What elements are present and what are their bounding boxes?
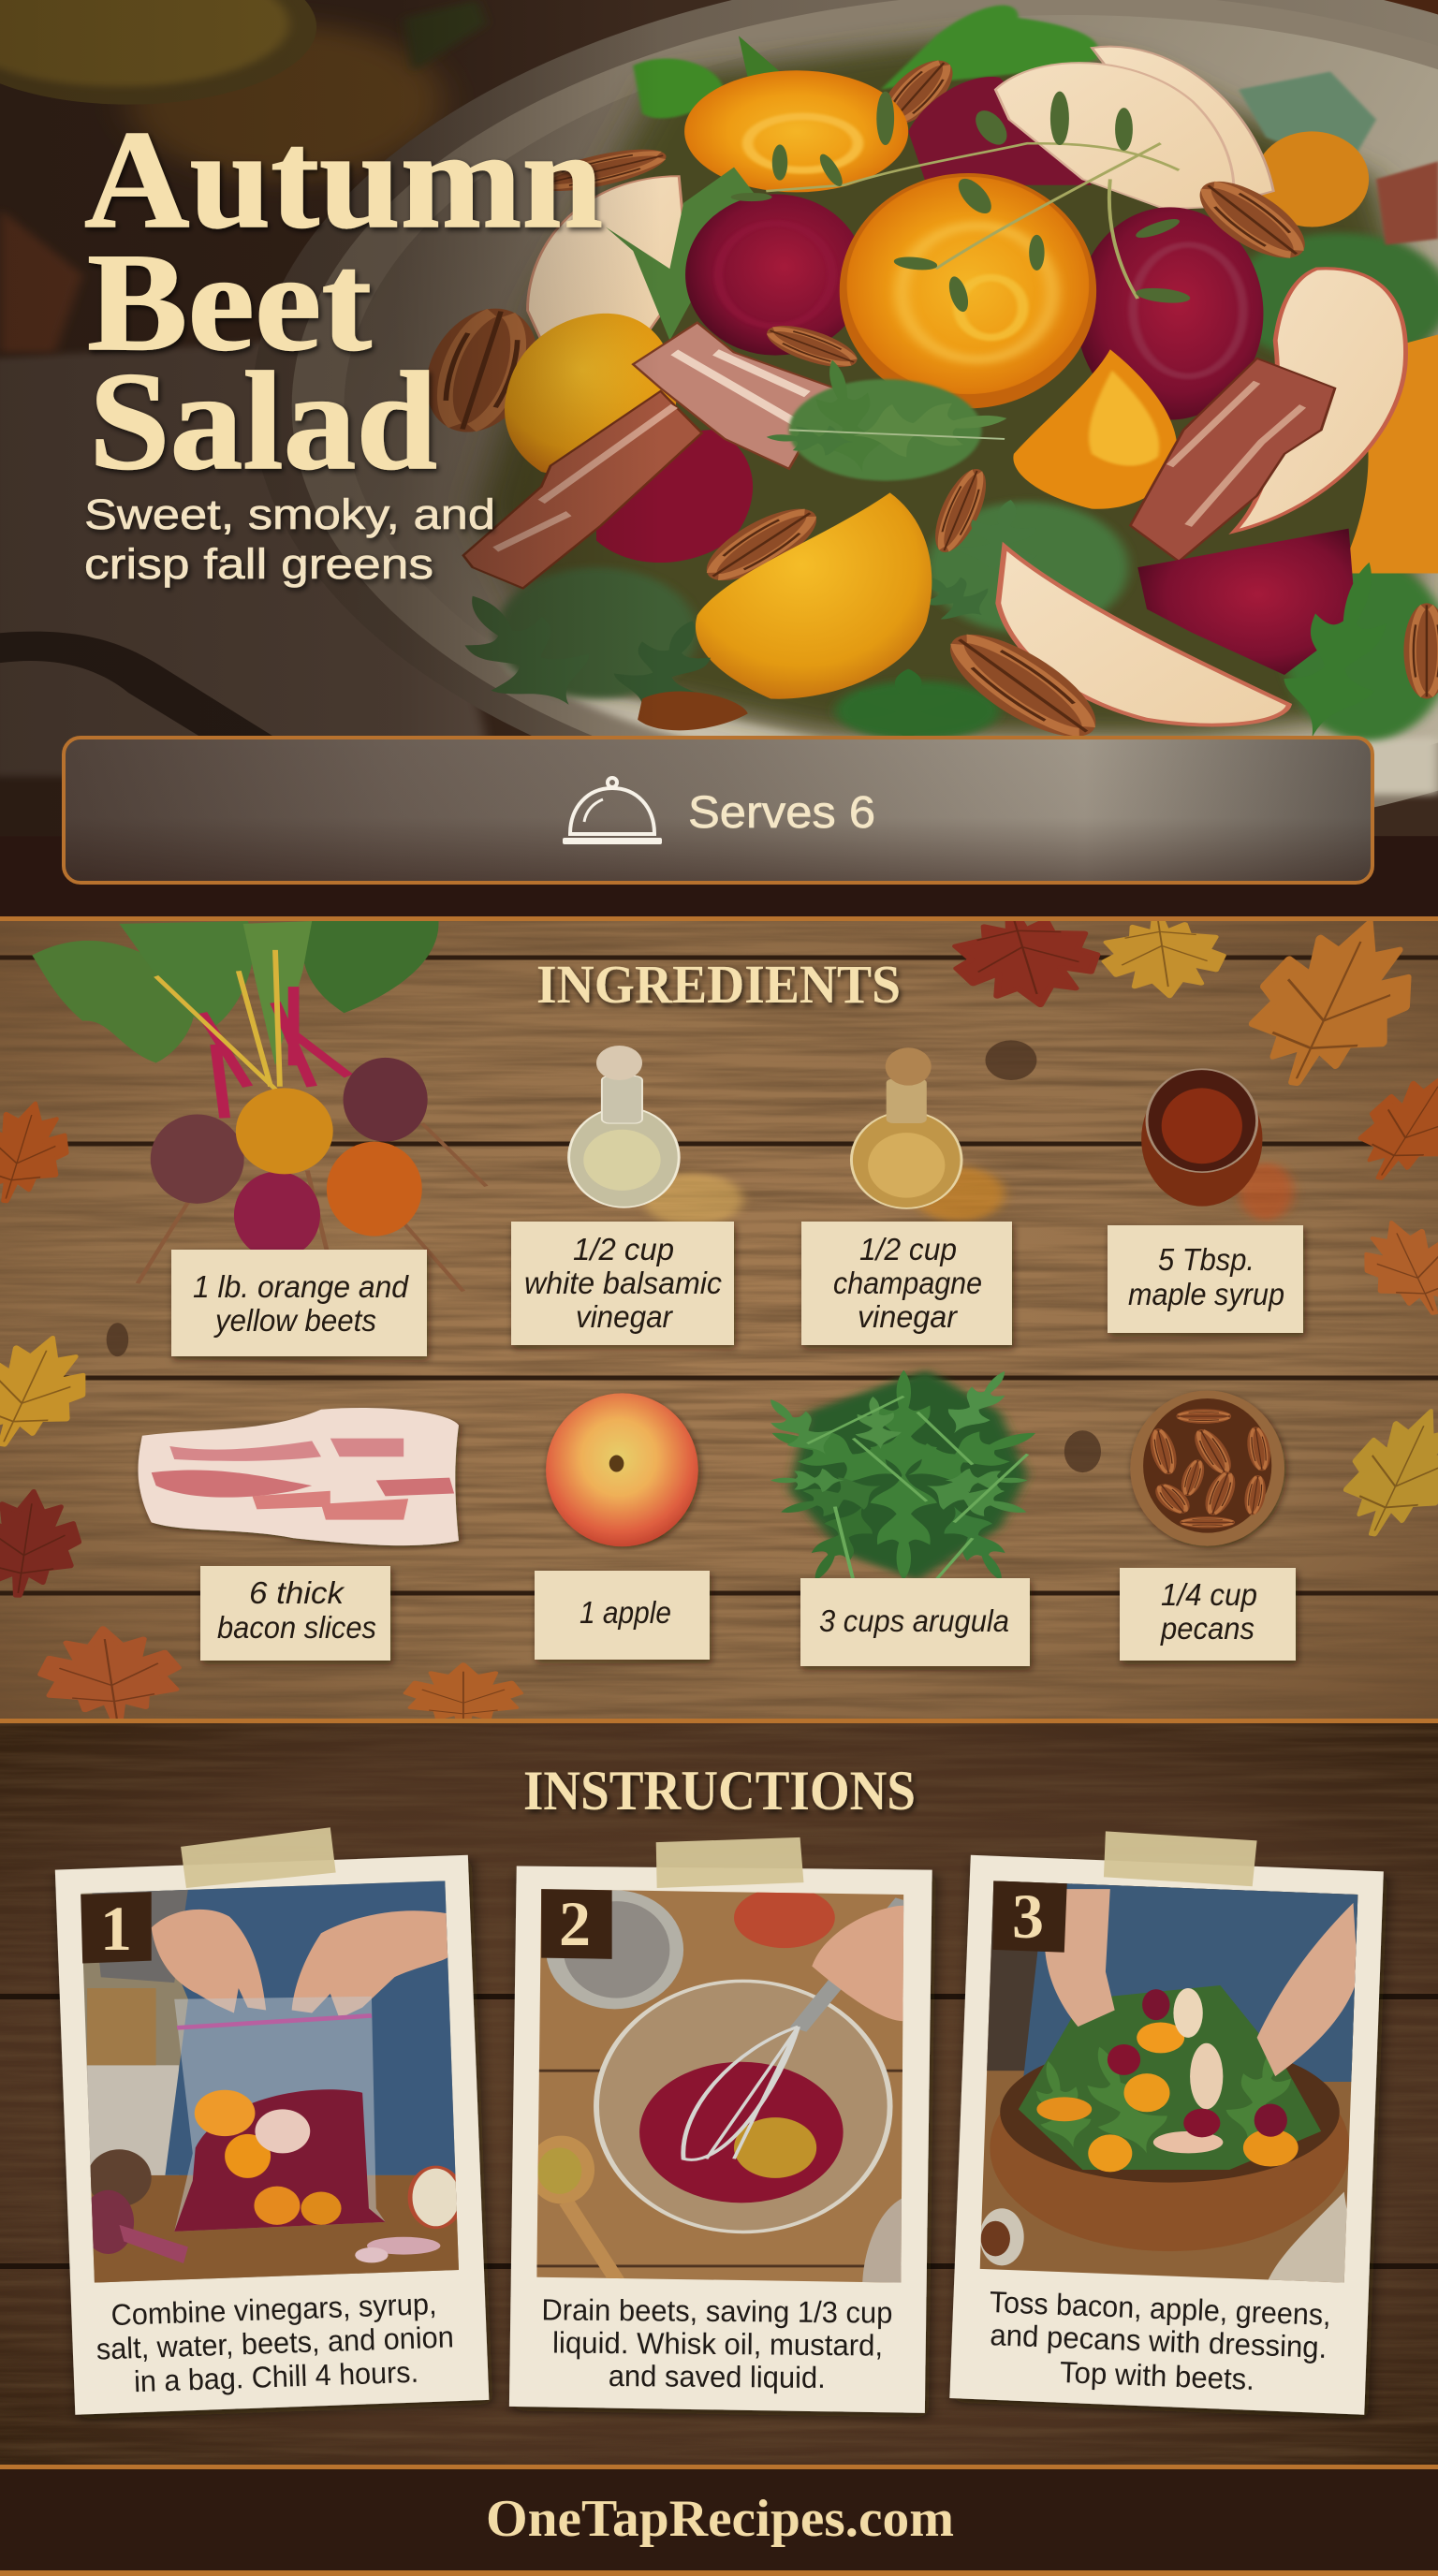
step 1 text: Combine vinegars, syrup,: [110, 2287, 437, 2332]
label: champagne vinegar: vinegar: [858, 1299, 959, 1334]
icon: bacon: [139, 1408, 459, 1545]
title: [84, 133, 607, 476]
label: champagne vinegar: champagne: [833, 1266, 982, 1300]
tape: [656, 1837, 803, 1888]
label: apple: 1 apple: [580, 1595, 671, 1630]
tape: [181, 1827, 336, 1888]
step 1 card: 1: [100, 1893, 132, 1964]
step 3 text: and pecans with dressing.: [990, 2318, 1328, 2364]
label: arugula: [800, 1578, 1030, 1666]
label: bacon: bacon slices: [217, 1610, 376, 1645]
serving bar: [64, 738, 1372, 883]
label: white balsamic vinegar: white balsamic: [524, 1266, 722, 1300]
label: maple syrup: [1108, 1225, 1303, 1333]
step 1 text: [95, 2286, 456, 2400]
title: Autumn: [84, 102, 603, 257]
step 3 text: Top with beets.: [1059, 2355, 1255, 2396]
label: pecans: 1/4 cup: [1161, 1577, 1257, 1612]
step 1 text: salt, water, beets, and onion: [95, 2320, 454, 2366]
step 3 photo: tossing salad: [973, 1878, 1367, 2286]
salad: [410, 6, 1438, 751]
step 2 card: [509, 1837, 932, 2413]
plate: [253, 0, 1438, 842]
footer: [0, 2469, 1438, 2576]
label: champagne vinegar: 1/2 cup: [859, 1232, 957, 1266]
label: champagne vinegar: [801, 1222, 1012, 1345]
label: apple: [535, 1571, 710, 1660]
label: maple syrup: maple syrup: [1128, 1277, 1284, 1311]
icon: serving cloche: [563, 778, 662, 844]
step 3 text: [986, 2285, 1331, 2399]
dark strip below the serving bar: [0, 842, 1438, 915]
label: pecans: [1120, 1568, 1296, 1661]
step number 1: [81, 1892, 152, 1964]
serves text: Serves 6: [688, 788, 875, 838]
label: beets: yellow beets: [213, 1303, 376, 1338]
icon: beet bunch: [32, 921, 486, 1292]
step 2 text: and saved liquid.: [609, 2359, 826, 2394]
thyme sprigs: [731, 92, 1192, 313]
ingredient illustrations: [0, 903, 1438, 1727]
label: beets: 1 lb. orange and: [193, 1269, 410, 1304]
label: bacon: [200, 1566, 390, 1661]
heading: ingredients: INGREDIENTS: [536, 954, 901, 1015]
step 3 card: 3: [1012, 1881, 1044, 1952]
background table and glass: [0, 0, 486, 776]
icon: maple syrup jar: [1141, 1069, 1294, 1221]
label: maple syrup: 5 Tbsp.: [1158, 1242, 1255, 1277]
subtitle: Sweet, smoky, and: [84, 490, 495, 538]
panel: ingredients: [0, 903, 1438, 1727]
step 2 photo: whisking dressing: [528, 1883, 917, 2286]
label: bacon: 6 thick: [249, 1575, 345, 1610]
panel: hero: [0, 0, 1438, 915]
icon: apple: [546, 1393, 698, 1546]
icon: champagne vinegar bottle: [851, 1047, 1005, 1222]
icon: arugula pile: [748, 1366, 1055, 1590]
step 1 text: in a bag. Chill 4 hours.: [133, 2355, 419, 2398]
hero photo: plate of salad: [0, 0, 1438, 842]
subtitle: [84, 490, 495, 588]
tape: [1104, 1831, 1257, 1886]
step 2 card: 2: [559, 1888, 591, 1959]
step number 2: [541, 1889, 612, 1959]
icon: bowl of pecans: [1130, 1391, 1284, 1546]
autumn leaves: [0, 903, 1438, 1727]
panel: instructions: [0, 1723, 1438, 2465]
step 2 text: liquid. Whisk oil, mustard,: [552, 2325, 883, 2363]
wood knots: [107, 1040, 1101, 1472]
label: arugula: 3 cups arugula: [819, 1603, 1009, 1638]
step 2 text: [541, 2292, 893, 2395]
label: white balsamic vinegar: vinegar: [576, 1299, 674, 1334]
subtitle: crisp fall greens: [84, 540, 433, 588]
step 1 card: [55, 1827, 489, 2415]
icon: white balsamic bottle: [569, 1046, 743, 1225]
heading: instructions: INSTRUCTIONS: [523, 1760, 916, 1822]
step 3 card: [949, 1831, 1384, 2415]
step 3 text: Toss bacon, apple, greens,: [989, 2285, 1331, 2332]
label: white balsamic vinegar: 1/2 cup: [573, 1232, 674, 1266]
label: pecans: pecans: [1160, 1611, 1255, 1646]
step 1 photo: beets in a bag: [73, 1878, 468, 2286]
title: Salad: [89, 344, 437, 499]
label: beets: [171, 1250, 427, 1356]
step 2 text: Drain beets, saving 1/3 cup: [541, 2292, 893, 2330]
label: white balsamic vinegar: [511, 1222, 734, 1345]
step number 3: [992, 1881, 1067, 1953]
title: Beet: [87, 225, 372, 380]
footer: OneTapRecipes.com: [486, 2490, 954, 2548]
